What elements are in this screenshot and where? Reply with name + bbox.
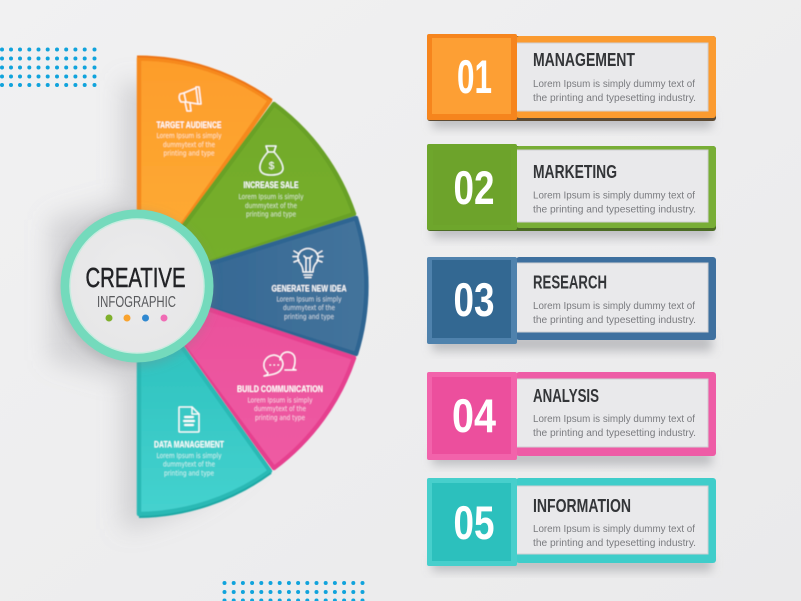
number 04: 04 — [452, 389, 496, 442]
body text: Lorem Ipsum is simply dummy text of — [533, 301, 695, 312]
heading: INFORMATION — [533, 495, 631, 516]
heading: increase sale: INCREASE SALE — [244, 180, 298, 190]
panel: semicircular fan — [137, 56, 366, 517]
text: generate new idea body: printing and type — [284, 313, 334, 321]
card 05: information — [427, 478, 716, 571]
body text: the printing and typesetting industry. — [533, 428, 696, 439]
heading: build communication: BUILD COMMUNICATION — [237, 384, 323, 394]
panel: target audience wedge — [137, 56, 272, 286]
icon: light bulb — [293, 248, 323, 278]
text: target audience body: Lorem Ipsum is simply — [156, 132, 222, 140]
text: target audience body: dummytext of the — [163, 141, 215, 149]
text: data management body: printing and type — [164, 470, 214, 478]
heading: ANALYSIS — [533, 385, 599, 406]
heading: data management: DATA MANAGEMENT — [154, 440, 224, 450]
card 03: research — [427, 257, 716, 351]
body text — [533, 190, 696, 216]
text: increase sale body: dummytext of the — [245, 202, 297, 210]
heading: MARKETING — [533, 161, 617, 182]
heading: MANAGEMENT — [533, 49, 636, 70]
icon: document — [179, 407, 199, 432]
text: increase sale body — [238, 193, 304, 218]
color dots — [106, 314, 168, 322]
icon: money bag — [260, 146, 283, 175]
text: build communication body: Lorem Ipsum is simply — [248, 396, 312, 404]
dot pattern: top left — [0, 48, 96, 87]
text: build communication body: printing and type — [255, 414, 305, 422]
body text: the printing and typesetting industry. — [533, 315, 696, 326]
number 01: 01 — [457, 50, 492, 103]
icon: megaphone — [179, 87, 201, 111]
subtitle: infographic: INFOGRAPHIC — [97, 294, 176, 311]
body text: Lorem Ipsum is simply dummy text of — [533, 190, 695, 202]
body text: Lorem Ipsum is simply dummy text of — [533, 414, 695, 425]
number 02: 02 — [454, 161, 494, 214]
panel: center circle — [57, 210, 214, 367]
body text — [533, 524, 696, 549]
text: increase sale body: printing and type — [246, 210, 296, 218]
card 04: analysis — [427, 372, 716, 465]
panel: data management wedge — [139, 286, 271, 517]
text: data management body — [156, 452, 222, 478]
body text — [533, 79, 696, 104]
body text: Lorem Ipsum is simply dummy text of — [533, 524, 695, 535]
text: increase sale body: Lorem Ipsum is simply — [238, 193, 304, 201]
icon: money bag: $ — [269, 161, 275, 172]
icon: chat bubbles — [264, 352, 296, 376]
text: build communication body — [248, 396, 312, 422]
number 03: 03 — [454, 273, 494, 326]
card 01: management — [427, 34, 716, 128]
panel: increase sale wedge — [139, 104, 354, 286]
text: generate new idea body: Lorem Ipsum is simply — [276, 296, 342, 304]
text: generate new idea body — [276, 296, 342, 321]
body text: Lorem Ipsum is simply dummy text of — [533, 79, 695, 90]
body text: the printing and typesetting industry. — [533, 93, 696, 104]
text: data management body: dummytext of the — [163, 460, 215, 468]
text: generate new idea body: dummytext of the — [283, 304, 335, 312]
text: target audience body — [156, 132, 222, 158]
body text: the printing and typesetting industry. — [533, 204, 696, 216]
heading: target audience: TARGET AUDIENCE — [156, 120, 222, 130]
panel: build communication wedge — [139, 286, 354, 468]
heading: RESEARCH — [533, 272, 607, 292]
title: creative: CREATIVE — [86, 262, 186, 293]
body text — [533, 301, 696, 326]
dot pattern: bottom — [222, 581, 364, 601]
panel: generate new idea wedge — [139, 218, 366, 354]
card 02: marketing — [427, 144, 716, 238]
body text: the printing and typesetting industry. — [533, 538, 696, 549]
fan shadow — [50, 80, 313, 530]
text: target audience body: printing and type — [164, 150, 214, 158]
body text — [533, 414, 696, 439]
heading: generate new idea: GENERATE NEW IDEA — [272, 284, 347, 294]
number 05: 05 — [454, 496, 494, 549]
text: data management body: Lorem Ipsum is simply — [156, 452, 222, 460]
text: build communication body: dummytext of the — [254, 405, 306, 413]
